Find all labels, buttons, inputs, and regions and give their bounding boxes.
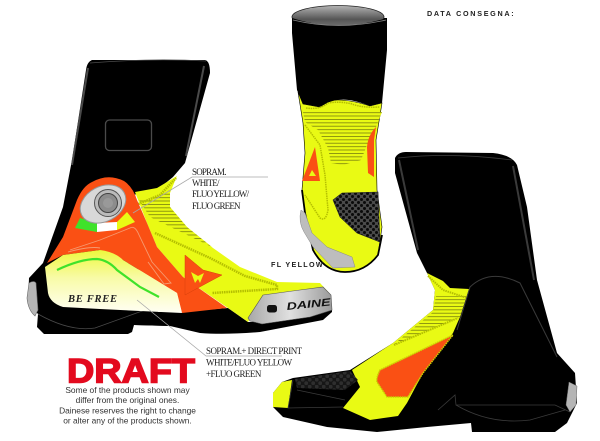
front boot striped tongue <box>303 112 382 165</box>
disclaimer text: Dainese reserves the right to change <box>59 406 196 416</box>
right boot striped panel <box>393 296 466 345</box>
lower material label: +FLUO GREEN <box>206 369 262 379</box>
left boot: side view <box>27 60 332 334</box>
disclaimer text: Some of the products shown may <box>65 385 190 395</box>
front boot outsole outline <box>302 190 382 272</box>
ankle slider <box>74 177 132 231</box>
front boot opening <box>292 6 384 28</box>
orange panel ridge lines <box>68 227 171 284</box>
right boot toe mesh <box>295 371 358 390</box>
left boot striped panel <box>139 190 212 247</box>
right boot heel guard <box>566 382 577 412</box>
upper material label <box>192 167 250 211</box>
fly yellow label: FL YELLOW <box>271 260 324 269</box>
front boot black shaft <box>292 18 387 107</box>
upper material label: WHITE/ <box>192 178 220 188</box>
front boot yellow body <box>298 92 382 272</box>
upper material label: FLUO GREEN <box>192 201 241 211</box>
lower material label: SOPRAM.+ DIRECT PRINT <box>206 346 303 356</box>
left boot orange heel panel <box>47 177 227 313</box>
disclaimer text: or alter any of the products shown. <box>63 416 192 426</box>
left boot yellow upper <box>135 176 331 322</box>
right boot: side view <box>273 152 577 432</box>
leader lines <box>133 177 282 356</box>
front boot orange side strip <box>367 127 376 177</box>
left boot sole band <box>134 308 332 334</box>
disclaimer text: differ from the original ones. <box>76 395 179 405</box>
toe slider: DAINE <box>286 296 332 313</box>
toe slider <box>248 287 332 324</box>
front boot toe slider <box>300 210 355 268</box>
BE FREE print: BE FREE <box>67 294 117 305</box>
right boot toe cap <box>273 380 292 408</box>
stitching <box>136 178 277 293</box>
DRAFT heading: DRAFT <box>67 352 195 390</box>
delivery date label: DATA CONSEGNA: <box>427 9 515 18</box>
heel guard <box>27 282 38 316</box>
right boot yellow upper <box>343 273 469 420</box>
left boot pale gradient panel <box>45 250 182 313</box>
right boot black body <box>273 152 577 432</box>
left boot black shaft and sole <box>28 60 210 334</box>
fluo green stripe <box>57 259 159 297</box>
front boot mesh <box>333 192 380 242</box>
upper material label: SOPRAM. <box>192 167 226 177</box>
ankle flag colours <box>75 212 135 232</box>
dainese logo <box>185 255 222 295</box>
lower material label: WHITE/FLUO YELLOW <box>206 358 293 368</box>
right boot orange panel <box>377 335 453 397</box>
front boot side stitching <box>305 125 328 219</box>
front boot <box>292 6 387 272</box>
lower material label <box>206 346 303 379</box>
right boot trim lines <box>288 155 570 421</box>
front boot logo <box>302 147 320 181</box>
disclaimer text <box>59 385 196 426</box>
upper material label: FLUO YELLOW/ <box>192 189 250 199</box>
shaft trim lines <box>38 60 206 329</box>
